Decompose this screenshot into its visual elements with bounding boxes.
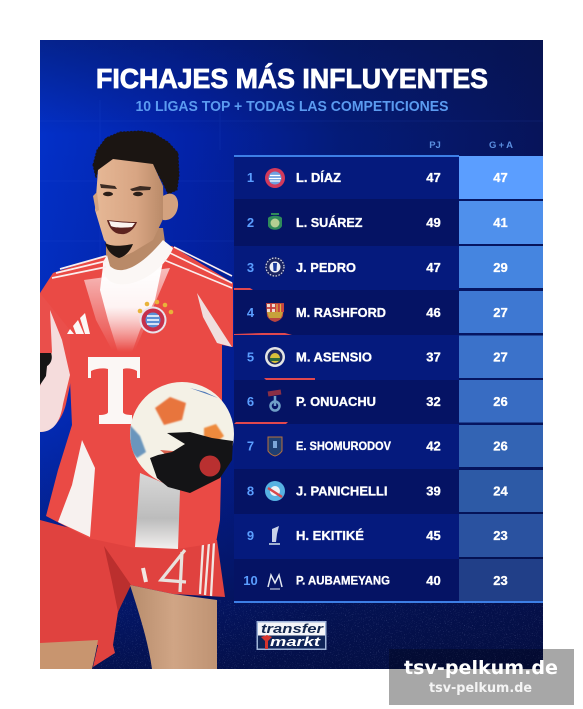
row 1: 1: [247, 170, 254, 185]
jersey chest fade: [84, 268, 170, 350]
row 3: J. PEDRO: [296, 260, 356, 275]
row 7: 42: [426, 438, 441, 454]
Bayern crest on jersey: [138, 300, 173, 334]
crest: Marseille: [268, 575, 282, 589]
row 5: [234, 335, 543, 380]
row 4: 27: [493, 305, 508, 320]
row 6: 6: [247, 394, 254, 409]
subtitle: 10 LIGAS TOP + TODAS LAS COMPETICIONES: [136, 99, 449, 115]
row 2: [234, 199, 543, 246]
player photo: [40, 131, 234, 669]
eyes and brows: [100, 184, 151, 196]
table bottom rule: [234, 601, 543, 603]
watermark: tsv-pelkum.de: [429, 681, 532, 696]
ranking table: [234, 140, 543, 603]
row 4: 46: [426, 305, 441, 320]
row 7: 26: [493, 438, 508, 454]
row 4: M. RASHFORD: [296, 305, 386, 320]
crest: Chelsea: [265, 257, 285, 277]
row 2: 41: [493, 215, 508, 230]
row 6: 32: [426, 394, 441, 409]
row 3: 47: [426, 260, 441, 275]
row 1: [234, 156, 543, 199]
crest: Bayern: [265, 168, 285, 188]
row 8: 39: [426, 484, 441, 498]
row 2: L. SUÁREZ: [296, 215, 363, 230]
face: [95, 159, 164, 258]
row 6: [234, 380, 543, 424]
mouth: [107, 220, 137, 234]
row 5: 27: [493, 350, 508, 364]
row 5: 37: [426, 350, 441, 364]
crest: Trabzonspor: [268, 392, 281, 410]
row 10: [234, 559, 543, 601]
crest: Strasbourg: [265, 481, 285, 501]
background panel: [40, 40, 543, 669]
row 6: 26: [493, 394, 508, 409]
watermark: tsv-pelkum.de: [404, 657, 558, 679]
transfermarkt logo: markt: [270, 634, 321, 649]
collar: [102, 240, 173, 274]
header rule: [234, 155, 459, 157]
crest: Sporting: [268, 214, 282, 230]
row 4: 4: [247, 305, 255, 320]
row 9: H. EKITIKÉ: [296, 528, 364, 543]
transfermarkt logo: [256, 621, 326, 650]
row 7: E. SHOMURODOV: [296, 439, 391, 453]
jersey side stripes: [58, 440, 95, 537]
row 6: P. ONUACHU: [296, 394, 376, 409]
row 10: P. AUBAMEYANG: [296, 574, 390, 588]
row 5: 5: [247, 350, 254, 364]
jersey T logo: [88, 357, 140, 424]
column headers: PJ: [429, 140, 441, 151]
row 10: 10: [243, 573, 258, 588]
row 1: 47: [426, 170, 441, 185]
crest: Fenerbahce: [265, 347, 285, 367]
row 9: 45: [426, 528, 441, 543]
row 3: [234, 246, 543, 290]
left hand glove: [40, 353, 52, 385]
shoulder stripes: [52, 247, 232, 288]
row 3: 3: [247, 260, 254, 275]
left arm sleeve: [40, 293, 71, 432]
glove: [150, 432, 233, 493]
crest: Liverpool: [269, 526, 280, 545]
row 7: [234, 424, 543, 469]
ears: [93, 192, 178, 220]
shorts: [40, 520, 225, 667]
row 10: 23: [493, 573, 508, 588]
adidas logo: [67, 313, 90, 334]
row 10: 40: [426, 573, 441, 588]
beard: [105, 243, 133, 258]
title: FICHAJES MÁS INFLUYENTES: [96, 63, 488, 94]
legs: [130, 585, 217, 669]
sleeve insert: [197, 293, 232, 347]
short stripes and number: [143, 542, 214, 596]
jersey torso: [40, 246, 233, 549]
watermark: [389, 649, 574, 705]
row 8: J. PANICHELLI: [296, 484, 388, 498]
row 1: L. DÍAZ: [296, 170, 341, 185]
row 7: 7: [247, 438, 254, 454]
crest: Basaksehir: [268, 437, 282, 456]
row 9: 23: [493, 528, 508, 543]
row 8: [234, 469, 543, 514]
row 2: 2: [247, 215, 254, 230]
ball: [130, 382, 234, 486]
jersey slivers over table: [234, 288, 315, 424]
column headers: [429, 140, 513, 151]
row 9: [234, 514, 543, 559]
row 4: [234, 290, 543, 335]
row 2: 49: [426, 215, 441, 230]
hair: [93, 131, 179, 194]
transfermarkt logo: transfer: [261, 621, 324, 636]
row 8: 24: [493, 484, 508, 498]
crest: Barcelona: [266, 303, 284, 322]
column headers: G + A: [489, 140, 513, 151]
row 3: 29: [493, 260, 508, 275]
row 9: 9: [247, 528, 254, 543]
row 8: 8: [247, 484, 254, 498]
neck: [106, 228, 165, 274]
row 5: M. ASENSIO: [296, 350, 372, 364]
title: [96, 63, 488, 115]
row 1: 47: [493, 170, 508, 185]
